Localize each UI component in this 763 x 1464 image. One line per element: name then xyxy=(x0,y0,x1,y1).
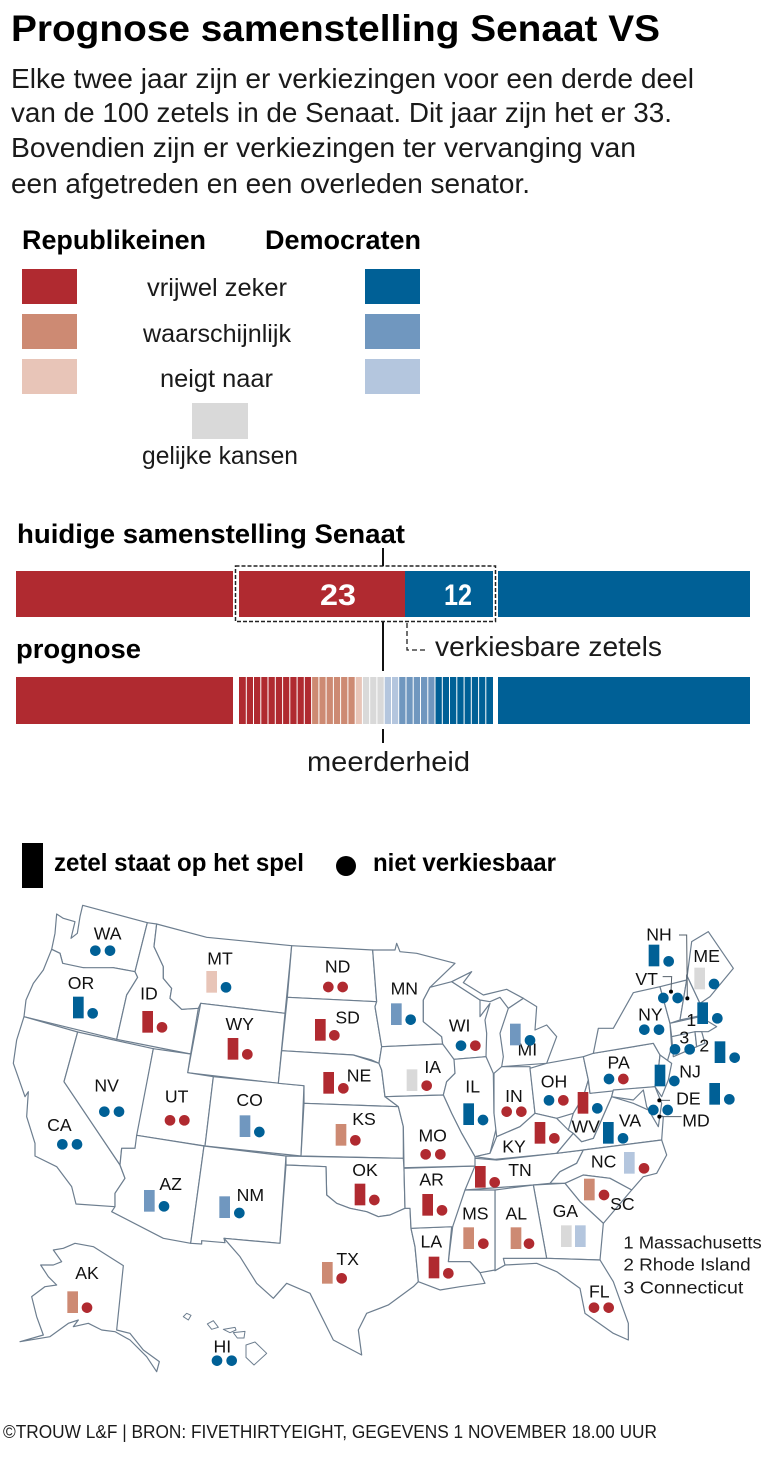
symbols: HI xyxy=(212,1336,237,1366)
symbols: VT: VT xyxy=(635,969,658,989)
symbols: MT xyxy=(206,948,233,993)
symbols: NH xyxy=(646,925,674,967)
symbols: UT: UT xyxy=(165,1086,189,1106)
heading: forecast: prognose xyxy=(16,634,141,664)
intro text: Bovendien zijn er verkiezingen ter vervanging van xyxy=(11,132,636,163)
symbols: FL xyxy=(589,1281,614,1313)
symbols: TX: TX xyxy=(336,1249,359,1269)
symbols: KY: KY xyxy=(502,1136,526,1156)
symbols: MI xyxy=(510,1024,537,1060)
symbols: DE: DE xyxy=(676,1088,701,1108)
symbols: Connecticut xyxy=(670,1027,695,1055)
symbols: IN xyxy=(501,1086,527,1117)
symbols: PA xyxy=(604,1052,630,1084)
title: Prognose samenstelling Senaat VS xyxy=(11,8,660,49)
symbols: TN: TN xyxy=(508,1160,532,1180)
symbols: MD: MD xyxy=(682,1111,710,1131)
symbols: IN: IN xyxy=(505,1086,523,1106)
footer credit: ©TROUW L&F | BRON: FIVETHIRTYEIGHT, GEGEVENS 1 NOVEMBER 18.00 UUR xyxy=(3,1422,657,1442)
symbols: GA xyxy=(553,1201,586,1247)
symbols: ME: ME xyxy=(693,946,720,966)
symbols: KS: KS xyxy=(352,1109,376,1129)
symbols: CO xyxy=(236,1090,265,1137)
bar: current Senate composition xyxy=(16,566,750,622)
legend: rating colours: Democraten xyxy=(265,225,421,255)
leader lines xyxy=(657,935,689,1119)
symbols: IA: IA xyxy=(424,1057,441,1077)
symbols: LA: LA xyxy=(421,1231,442,1251)
intro text: een afgetreden en een overleden senator. xyxy=(11,168,530,199)
symbols: KY xyxy=(502,1122,560,1156)
symbols: TX xyxy=(322,1249,359,1284)
symbols: NY: NY xyxy=(638,1005,663,1025)
symbols: VT xyxy=(635,969,683,1003)
symbols: WY xyxy=(225,1014,254,1060)
symbols: MI: MI xyxy=(518,1040,537,1060)
symbols: GA: GA xyxy=(553,1201,578,1221)
symbols: NC: NC xyxy=(591,1151,617,1171)
symbols: OK: OK xyxy=(352,1160,378,1180)
symbols: AK xyxy=(67,1263,99,1313)
symbols: NM xyxy=(219,1185,264,1218)
symbols: OR: OR xyxy=(68,973,94,993)
symbols: OH: OH xyxy=(541,1072,567,1092)
symbols: CA xyxy=(47,1115,82,1150)
symbols: AL: AL xyxy=(506,1204,527,1224)
symbols: MT: MT xyxy=(207,948,233,968)
bar: current Senate composition: 23 xyxy=(320,579,356,612)
symbols: WV xyxy=(571,1092,603,1137)
legend: rating colours: vrijwel zeker xyxy=(147,274,287,302)
symbols: MD xyxy=(648,1105,710,1131)
symbols: AZ xyxy=(144,1174,182,1212)
symbols: MS xyxy=(462,1204,489,1249)
symbols: Connecticut: 3 xyxy=(679,1027,689,1047)
intro text: van de 100 zetels in de Senaat. Dit jaar zijn het er 33. xyxy=(11,97,672,128)
intro text: Elke twee jaar zijn er verkiezingen voor een derde deel xyxy=(11,63,694,94)
symbols: ID: ID xyxy=(140,983,158,1003)
key: numbered states: 2 Rhode Island xyxy=(623,1255,751,1275)
legend: map symbols: zetel staat op het spel xyxy=(54,849,304,877)
symbols: MO xyxy=(418,1126,447,1160)
legend: map symbols xyxy=(22,843,556,888)
symbols: AK: AK xyxy=(75,1263,99,1283)
symbols: WV: WV xyxy=(571,1117,600,1137)
symbols: IL: IL xyxy=(465,1076,480,1096)
symbols: Rhode Island: 2 xyxy=(699,1036,709,1056)
symbols: MN: MN xyxy=(391,978,418,998)
symbols: OR xyxy=(68,973,98,1019)
key: numbered states: 1 Massachusetts xyxy=(623,1232,762,1252)
symbols: CA: CA xyxy=(47,1115,72,1135)
key: numbered states xyxy=(623,1232,762,1297)
symbols: NM: NM xyxy=(237,1185,264,1205)
symbols: KS xyxy=(336,1109,376,1146)
symbols: CO: CO xyxy=(236,1090,263,1110)
symbols: AR: AR xyxy=(419,1169,444,1189)
symbols: AL xyxy=(506,1204,534,1249)
symbols: VA xyxy=(603,1111,641,1144)
symbols: SD: SD xyxy=(335,1007,360,1027)
symbols: Massachusetts: 1 xyxy=(686,1010,696,1030)
symbols: NE xyxy=(323,1066,371,1094)
symbols: NV xyxy=(94,1076,124,1117)
symbols: NC xyxy=(591,1151,649,1174)
callout: electable seats: verkiesbare zetels xyxy=(435,631,662,662)
symbols: ND: ND xyxy=(325,957,350,977)
bar: forecast xyxy=(16,677,750,724)
symbols: ME xyxy=(693,946,720,989)
legend: rating colours: Republikeinen xyxy=(22,225,206,255)
symbols: WI: WI xyxy=(449,1015,470,1035)
symbols: TN xyxy=(475,1160,532,1188)
symbols: NV: NV xyxy=(94,1076,119,1096)
map: western states xyxy=(13,905,418,1372)
symbols: PA: PA xyxy=(608,1052,630,1072)
label: majority: meerderheid xyxy=(307,746,470,777)
symbols: Rhode Island xyxy=(699,1036,740,1063)
symbols: Massachusetts xyxy=(686,1002,723,1030)
bar: current Senate composition: 12 xyxy=(444,579,472,612)
legend: rating colours: gelijke kansen xyxy=(142,442,298,470)
symbols: NJ xyxy=(655,1061,701,1086)
symbols: MO: MO xyxy=(418,1126,447,1146)
symbols: VA: VA xyxy=(619,1111,641,1131)
map: eastern states xyxy=(373,925,762,1340)
intro text xyxy=(11,63,694,199)
symbols: ND xyxy=(323,957,350,992)
symbols: ID xyxy=(140,983,167,1033)
symbols: AZ: AZ xyxy=(159,1174,182,1194)
heading: current composition: huidige samenstelling Senaat xyxy=(17,519,405,549)
symbols: AR xyxy=(419,1169,447,1216)
symbols: NE: NE xyxy=(347,1066,371,1086)
symbols: WY: WY xyxy=(225,1014,254,1034)
symbols: OK xyxy=(352,1160,380,1205)
symbols: WA: WA xyxy=(94,923,122,943)
symbols: FL: FL xyxy=(589,1281,610,1301)
symbols: OH xyxy=(541,1072,569,1106)
symbols: IL xyxy=(463,1076,488,1125)
symbols: IA xyxy=(407,1057,441,1091)
symbols: SC xyxy=(584,1179,635,1214)
symbols: SC: SC xyxy=(610,1194,635,1214)
symbols: HI: HI xyxy=(214,1336,231,1356)
symbols: UT xyxy=(165,1086,190,1126)
symbols: DE xyxy=(676,1083,735,1108)
symbols: LA xyxy=(421,1231,454,1279)
legend: map symbols: niet verkiesbaar xyxy=(373,849,556,877)
symbols: SD xyxy=(315,1007,360,1041)
symbols: NH: NH xyxy=(646,925,672,945)
majority marker line xyxy=(382,548,384,743)
legend: rating colours: waarschijnlijk xyxy=(142,320,292,348)
symbols: MN xyxy=(391,978,418,1025)
symbols: WI xyxy=(449,1015,481,1051)
legend: rating colours: neigt naar xyxy=(160,365,273,393)
legend: rating colours xyxy=(22,225,421,470)
symbols: NJ: NJ xyxy=(679,1061,701,1081)
symbols: NY xyxy=(638,1005,664,1035)
key: numbered states: 3 Connecticut xyxy=(623,1277,743,1297)
symbols: MS: MS xyxy=(462,1204,489,1224)
symbols: WA xyxy=(90,923,122,956)
